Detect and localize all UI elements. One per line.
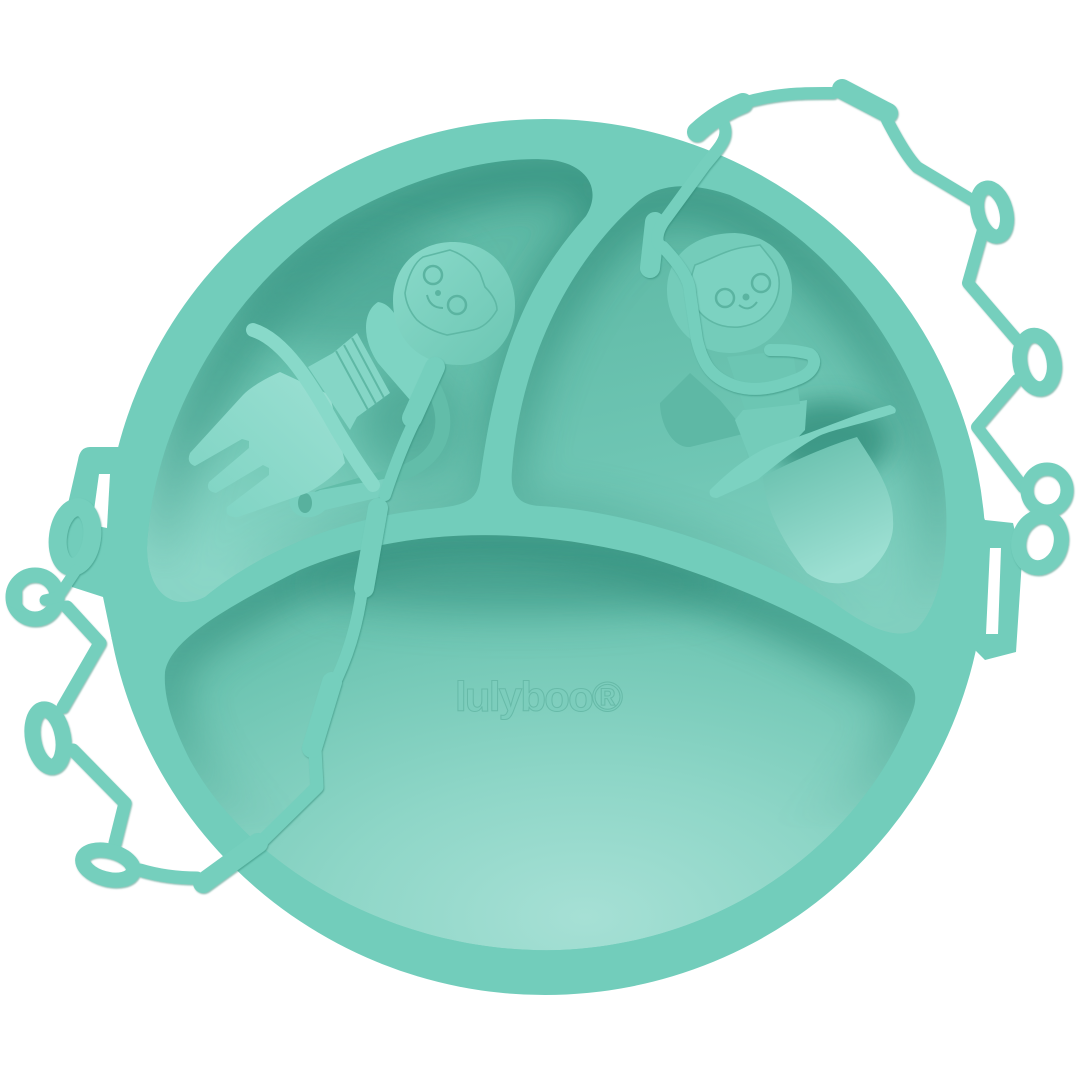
fork handle bear head xyxy=(393,242,515,365)
compartment: top right xyxy=(504,186,946,646)
compartment: bottom xyxy=(165,535,915,958)
fork xyxy=(189,330,390,517)
spoon handle bear head xyxy=(667,233,792,353)
brand logo embossed: lulyboo® xyxy=(455,673,623,720)
compartment: top left xyxy=(147,159,607,616)
spoon strap loop xyxy=(660,373,747,447)
plate body xyxy=(62,119,1022,995)
fork strap loop xyxy=(289,385,443,517)
spoon xyxy=(710,350,896,583)
fork strap on neck xyxy=(366,302,430,400)
left chain strap xyxy=(7,367,435,885)
right chain strap xyxy=(650,89,1067,573)
